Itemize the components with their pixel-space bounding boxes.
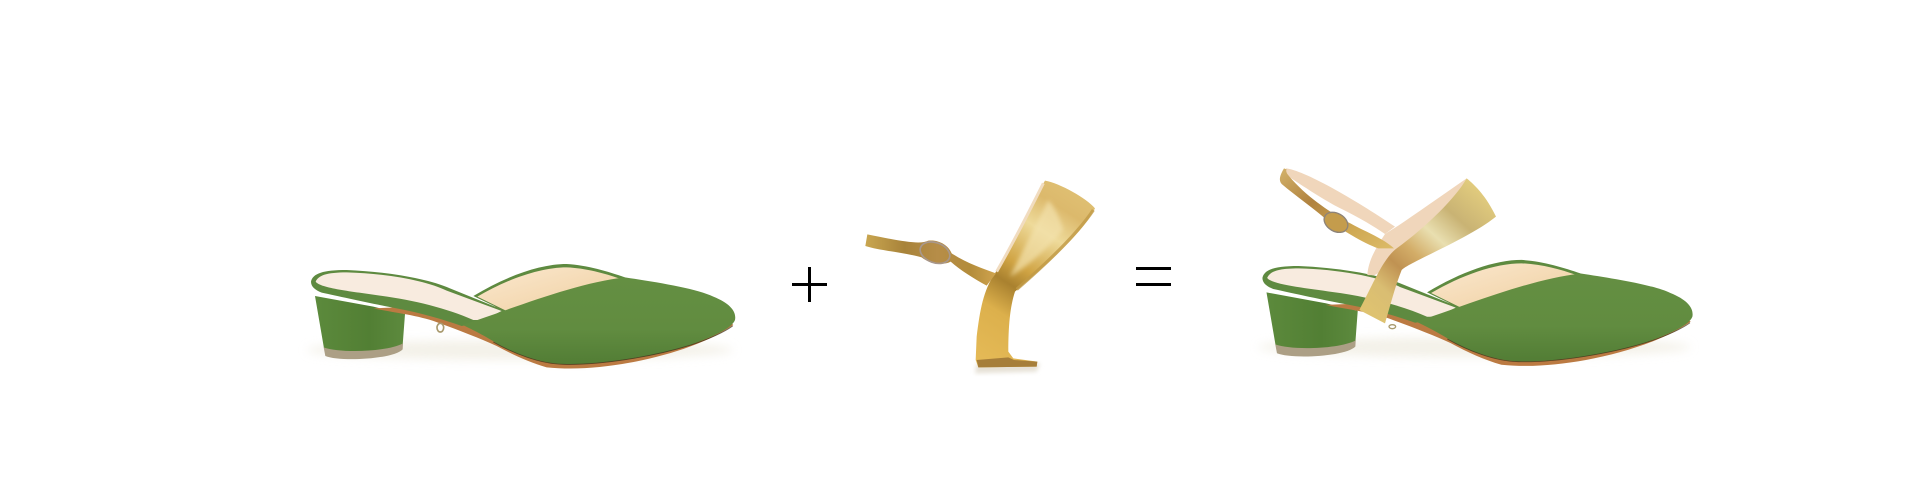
- heel: [315, 296, 405, 353]
- insole: [1267, 268, 1456, 317]
- heel cap: [1275, 340, 1356, 356]
- band outer shade: [1017, 210, 1093, 289]
- rear rim: [1262, 266, 1461, 323]
- vamp: [1416, 273, 1693, 361]
- rear rim: [311, 270, 507, 326]
- plus sign: [792, 267, 827, 302]
- shoe: green mule: [307, 264, 735, 369]
- sole edge line: [493, 326, 733, 364]
- band lining: [1367, 178, 1467, 275]
- vamp: [463, 277, 735, 364]
- strap shadow: [975, 363, 1040, 373]
- heel: [1266, 292, 1358, 350]
- buckle: [917, 238, 953, 267]
- interior lining: [473, 264, 625, 312]
- band foot: [977, 357, 1037, 367]
- thin strap: [865, 234, 996, 286]
- shoe with strap attached: [1258, 168, 1693, 366]
- sole: [1326, 303, 1691, 366]
- interior lining: [1427, 260, 1581, 309]
- tall band: [976, 181, 1095, 367]
- sole edge line: [1447, 323, 1690, 362]
- equals sign: [1136, 267, 1171, 286]
- heel cap: [324, 343, 403, 359]
- metallic gold strap: [865, 181, 1095, 373]
- buckle: [1321, 208, 1351, 236]
- back strap lining: [1286, 168, 1395, 234]
- lower buckle ring: [1389, 325, 1396, 329]
- insole: [316, 272, 502, 320]
- sole: [373, 307, 733, 369]
- ground shadow: [307, 340, 733, 360]
- ground shadow: [1258, 337, 1691, 357]
- band highlight: [1010, 200, 1063, 277]
- buckle ring: [437, 323, 444, 332]
- attached gold straps: [1280, 168, 1496, 329]
- back strap: [1280, 168, 1394, 248]
- green mule base: [1258, 260, 1693, 366]
- band lining edge: [997, 183, 1043, 272]
- wide band: [1359, 178, 1496, 323]
